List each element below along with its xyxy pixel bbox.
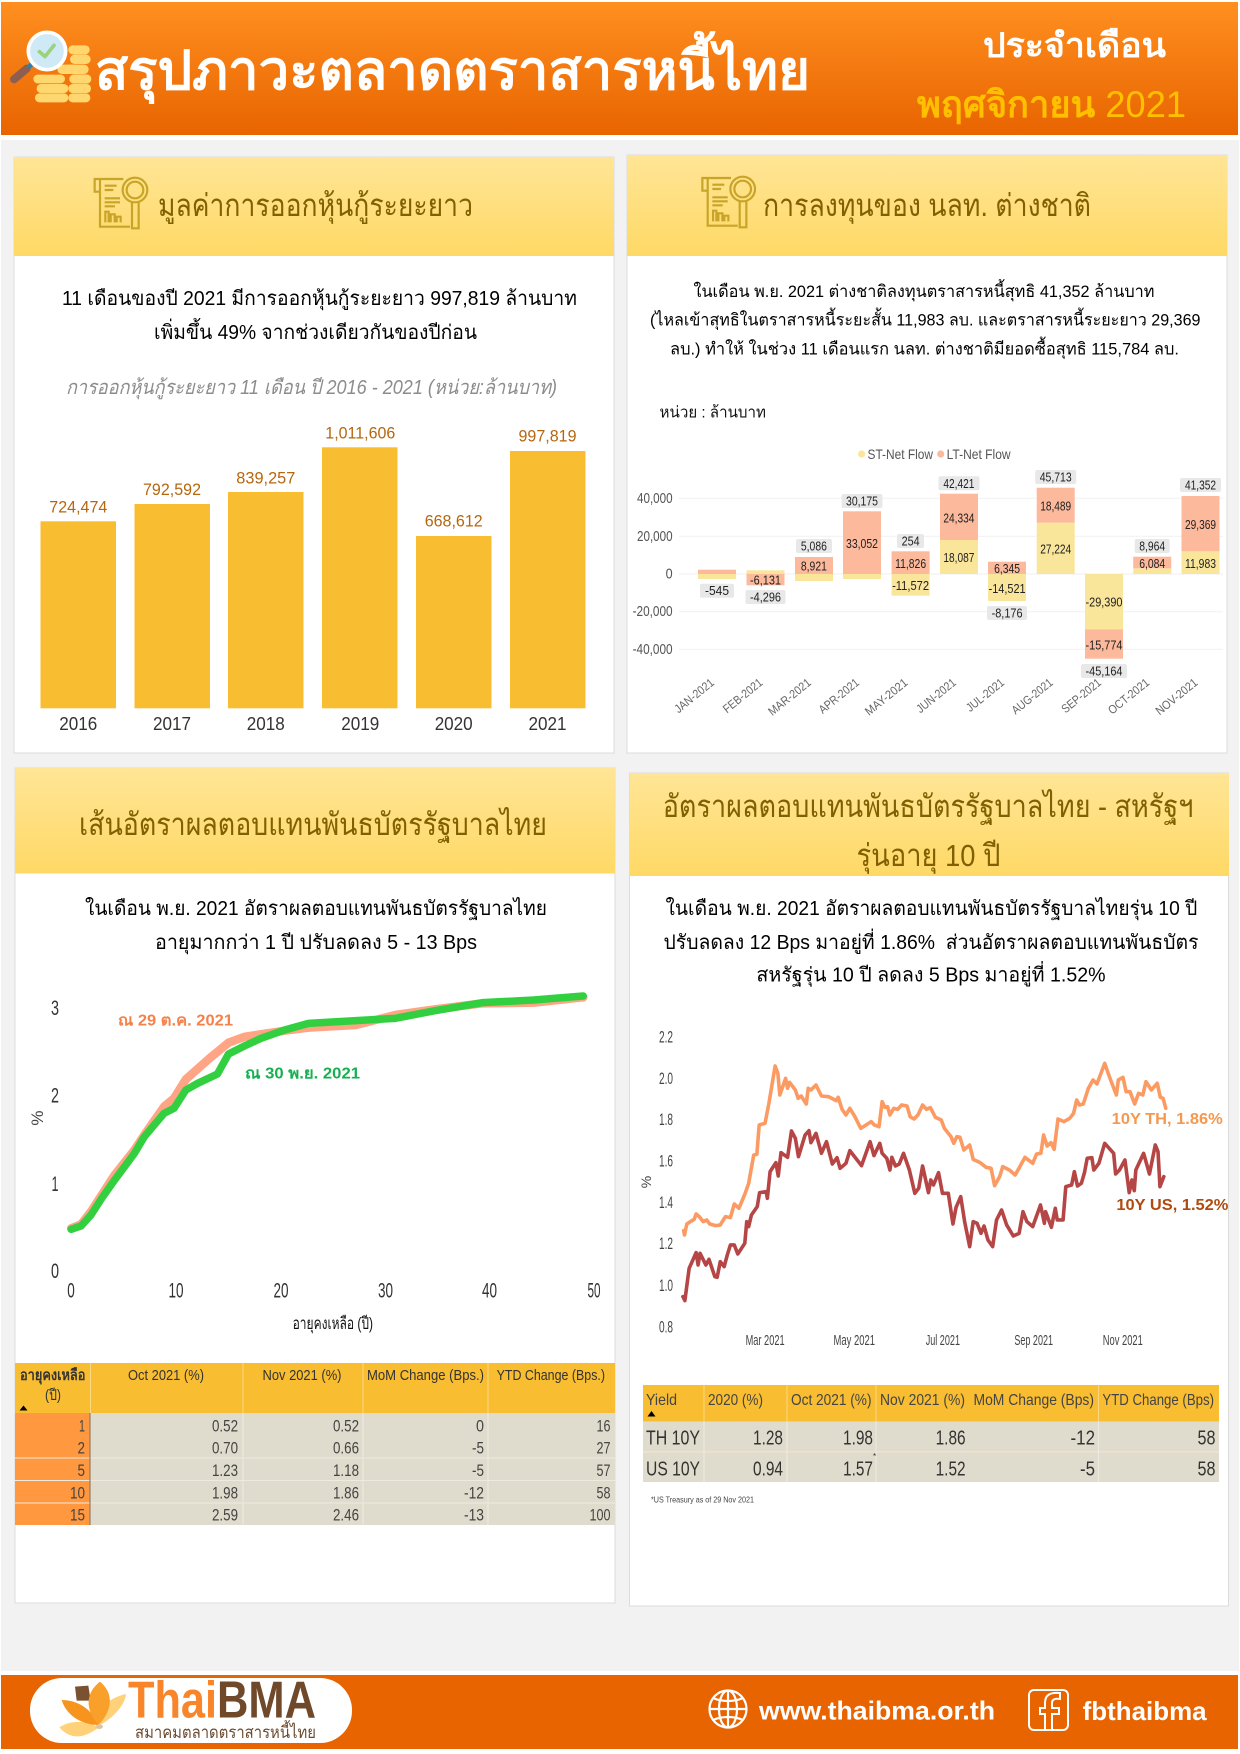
stacked bar chart: net flows: -11,572 bbox=[892, 578, 929, 593]
summary text: ในเดือน พ.ย. 2021 อัตราผลตอบแทนพันธบัตรรัฐบาลไทย bbox=[85, 897, 547, 920]
line chart: 10-year yields: 1.2 bbox=[659, 1234, 673, 1253]
line chart: 10-year yields: 2.0 bbox=[659, 1069, 673, 1088]
period month: พฤศจิกายน 2021 bbox=[917, 84, 1186, 125]
summary text: (ไหลเข้าสุทธิในตราสารหนี้ระยะสั้น 11,983 ลบ. และตราสารหนี้ระยะยาว 29,369 bbox=[650, 308, 1200, 330]
table: yield by remaining maturity: 1.23 bbox=[212, 1461, 238, 1480]
table: yield by remaining maturity: 0.52 bbox=[333, 1417, 359, 1436]
stacked bar chart: net flows: 45,713 bbox=[1040, 470, 1072, 484]
summary text: เพิ่มขึ้น 49% จากช่วงเดียวกันของปีก่อน bbox=[154, 318, 477, 344]
bar chart: annual issuance: 1,011,606 bbox=[325, 423, 395, 442]
table: yield by remaining maturity: 0 bbox=[476, 1417, 484, 1436]
stacked bar chart: net flows: 11,983 bbox=[1185, 556, 1216, 571]
bar chart: annual issuance: 2017 bbox=[153, 714, 191, 734]
ThaiBMA logo bbox=[30, 1672, 352, 1743]
icon: facebook bbox=[1029, 1690, 1068, 1730]
panel heading band bbox=[14, 157, 614, 256]
table: 10-year yield comparison: -5 bbox=[1080, 1458, 1095, 1480]
bar chart: annual issuance: 997,819 bbox=[518, 427, 576, 446]
summary text bbox=[85, 897, 547, 955]
summary text bbox=[650, 279, 1200, 360]
stacked bar chart: net flows: MAR-2021 bbox=[765, 675, 814, 718]
line chart: yield curve: 3 bbox=[51, 997, 59, 1020]
table: yield by remaining maturity: YTD Change (Bps.) bbox=[497, 1367, 605, 1384]
table: 10-year yield comparison: MoM Change (Bps) bbox=[974, 1392, 1094, 1409]
stacked bar chart: net flows: SEP-2021 bbox=[1059, 675, 1104, 716]
table: 10-year yield comparison: 1.57 bbox=[843, 1458, 873, 1480]
table: yield by remaining maturity: Oct 2021 (%) bbox=[128, 1367, 204, 1384]
table: yield by remaining maturity: -12 bbox=[464, 1484, 484, 1503]
stacked bar chart: net flows: FEB-2021 bbox=[720, 675, 766, 716]
table: 10-year yield comparison: Yield bbox=[646, 1392, 677, 1409]
table: 10-year yield comparison: 58 bbox=[1198, 1458, 1216, 1480]
heading text: การลงทุนของ นลท. ต่างชาติ bbox=[763, 188, 1091, 225]
table: 10-year yield comparison: Nov 2021 (%) bbox=[880, 1392, 965, 1409]
stacked bar chart: net flows: JUL-2021 bbox=[963, 675, 1007, 715]
table: yield by remaining maturity: 57 bbox=[596, 1461, 610, 1480]
line chart: yield curve: 20 bbox=[274, 1280, 288, 1303]
line chart: 10-year yields: 1.8 bbox=[659, 1110, 673, 1129]
bar chart: annual issuance: 668,612 bbox=[425, 512, 483, 531]
line chart: 10-year yields: Mar 2021 bbox=[746, 1332, 785, 1349]
icon: globe bbox=[710, 1690, 746, 1728]
summary text: อายุมากกว่า 1 ปี ปรับลดลง 5 - 13 Bps bbox=[155, 932, 477, 955]
line chart: 10-year yields: 10Y TH, 1.86% bbox=[1112, 1111, 1223, 1128]
line chart: 10-year yields: 1.6 bbox=[659, 1152, 673, 1170]
table: 10-year yield comparison: * bbox=[873, 1452, 876, 1461]
line chart: 10-year yields: 1.0 bbox=[659, 1276, 673, 1295]
panel: foreign investor flows bbox=[627, 155, 1227, 753]
stacked bar chart: net flows: -8,176 bbox=[992, 606, 1023, 620]
stacked bar chart: net flows: 5,086 bbox=[801, 538, 827, 554]
legend: ST-Net Flow bbox=[868, 446, 934, 462]
panel heading band bbox=[627, 155, 1227, 256]
table: 10-year yield comparison: 2020 (%) bbox=[708, 1392, 763, 1409]
table: 10-year yield comparison: 58 bbox=[1198, 1428, 1216, 1450]
table: 10-year yield comparison: 0.94 bbox=[753, 1458, 783, 1480]
period label: ประจำเดือน bbox=[983, 27, 1166, 65]
website address: www.thaibma.or.th bbox=[758, 1696, 995, 1726]
line chart: 10-year yields: Nov 2021 bbox=[1103, 1332, 1143, 1349]
stacked bar chart: net flows: -15,774 bbox=[1086, 638, 1122, 652]
facebook page name: fbthaibma bbox=[1083, 1696, 1207, 1726]
table: yield by remaining maturity: -13 bbox=[464, 1506, 484, 1525]
summary text: ในเดือน พ.ย. 2021 อัตราผลตอบแทนพันธบัตรรัฐบาลไทยรุ่น 10 ปี bbox=[666, 897, 1197, 921]
line chart: 10-year yields bbox=[638, 1028, 1228, 1349]
icon: coins and magnifier bbox=[14, 32, 91, 102]
summary text bbox=[664, 897, 1199, 988]
stacked bar chart: net flows: 20,000 bbox=[637, 528, 673, 545]
line chart: 10-year yields: % bbox=[638, 1176, 654, 1188]
table: yield by remaining maturity: 5 bbox=[78, 1461, 85, 1480]
ThaiBMA logo: สมาคมตลาดตราสารหนี้ไทย bbox=[135, 1720, 316, 1742]
icon: report with magnifier bbox=[702, 177, 755, 227]
legend bbox=[858, 446, 1011, 462]
line chart: 10-year yields: 0.8 bbox=[659, 1318, 673, 1336]
summary text: ปรับลดลง 12 Bps มาอยู่ที่ 1.86% ส่วนอัตราผลตอบแทนพันธบัตร bbox=[664, 928, 1199, 955]
stacked bar chart: net flows: MAY-2021 bbox=[862, 675, 911, 718]
stacked bar chart: net flows: 24,334 bbox=[943, 510, 974, 526]
heading text: รุ่นอายุ 10 ปี bbox=[856, 838, 1000, 875]
table: yield by remaining maturity: Nov 2021 (%) bbox=[262, 1367, 342, 1384]
line chart: yield curve: อายุคงเหลือ (ปี) bbox=[293, 1314, 373, 1334]
bar chart: annual issuance: 2018 bbox=[247, 714, 285, 734]
table: 10-year yield comparison: 1.52 bbox=[936, 1458, 966, 1480]
line chart: yield curve: 30 bbox=[378, 1280, 393, 1303]
panel: long-term debenture issuance bbox=[14, 157, 614, 753]
table: yield by remaining maturity: 1 bbox=[79, 1417, 85, 1436]
title: สรุปภาวะตลาดตราสารหนี้ไทย bbox=[95, 31, 810, 105]
table: 10-year yield comparison: 1.98 bbox=[843, 1428, 873, 1450]
stacked bar chart: net flows: -45,164 bbox=[1086, 664, 1122, 678]
ThaiBMA logo: Thai bbox=[128, 1672, 217, 1730]
table: yield by remaining maturity: 15 bbox=[70, 1506, 85, 1525]
table: yield by remaining maturity: อายุคงเหลือ bbox=[20, 1367, 85, 1385]
table: yield by remaining maturity: 16 bbox=[596, 1417, 610, 1436]
panel: Thai vs US 10-year yields bbox=[630, 773, 1229, 1606]
table: yield by remaining maturity: 100 bbox=[590, 1506, 610, 1525]
line chart: 10-year yields: Sep 2021 bbox=[1014, 1332, 1053, 1349]
stacked bar chart: net flows: 29,369 bbox=[1185, 517, 1216, 532]
line chart: yield curve: 40 bbox=[482, 1280, 497, 1303]
stacked bar chart: net flows: 8,921 bbox=[801, 558, 827, 574]
panel heading band bbox=[630, 773, 1229, 876]
table: yield by remaining maturity bbox=[15, 1363, 615, 1525]
line chart: yield curve: 0 bbox=[67, 1280, 75, 1303]
table: yield by remaining maturity: 1.98 bbox=[212, 1484, 238, 1503]
stacked bar chart: net flows: 30,175 bbox=[846, 494, 878, 508]
stacked bar chart: net flows: -6,131 bbox=[750, 572, 781, 588]
legend: LT-Net Flow bbox=[947, 446, 1011, 462]
line chart: 10-year yields: Jul 2021 bbox=[926, 1332, 960, 1349]
stacked bar chart: net flows: 6,345 bbox=[994, 561, 1020, 576]
panel: Thai government yield curve bbox=[15, 768, 615, 1603]
bar chart: annual issuance: 839,257 bbox=[236, 468, 295, 487]
stacked bar chart: net flows: 18,087 bbox=[943, 550, 974, 565]
table: yield by remaining maturity: 1.18 bbox=[333, 1461, 359, 1480]
table: 10-year yield comparison: -12 bbox=[1070, 1428, 1095, 1450]
line chart: yield curve: 10 bbox=[168, 1280, 184, 1303]
stacked bar chart: net flows: JUN-2021 bbox=[913, 675, 959, 716]
bar chart: annual issuance: 792,592 bbox=[143, 480, 201, 499]
table: yield by remaining maturity: (ปี) bbox=[45, 1387, 61, 1404]
bar chart: annual issuance: 724,474 bbox=[49, 498, 107, 517]
stacked bar chart: net flows: APR-2021 bbox=[816, 675, 862, 717]
summary text: 11 เดือนของปี 2021 มีการออกหุ้นกู้ระยะยาว 997,819 ล้านบาท bbox=[62, 288, 577, 311]
unit label: หน่วย : ล้านบาท bbox=[660, 404, 766, 422]
footer bar bbox=[1, 1672, 1238, 1749]
stacked bar chart: net flows: -4,296 bbox=[750, 590, 781, 604]
table: yield by remaining maturity: 2 bbox=[78, 1439, 85, 1458]
stacked bar chart: net flows: 33,052 bbox=[846, 536, 878, 551]
stacked bar chart: net flows: -14,521 bbox=[989, 581, 1026, 596]
line chart: 10-year yields: 2.2 bbox=[659, 1028, 673, 1046]
line chart: yield curve: 2 bbox=[51, 1084, 59, 1108]
icon: lotus bbox=[59, 1682, 126, 1736]
summary text bbox=[62, 288, 577, 344]
summary text: ลบ.) ทำให้ ในช่วง 11 เดือนแรก นลท. ต่างชาติมียอดซื้อสุทธิ 115,784 ลบ. bbox=[670, 336, 1179, 360]
table: 10-year yield comparison: 1.86 bbox=[936, 1428, 966, 1450]
bar chart: annual issuance bbox=[40, 423, 586, 734]
table: 10-year yield comparison: 1.28 bbox=[753, 1428, 783, 1450]
bar chart: annual issuance: 2021 bbox=[528, 714, 566, 734]
table: 10-year yield comparison: YTD Change (Bps) bbox=[1102, 1392, 1214, 1409]
line chart: 10-year yields: 10Y US, 1.52% bbox=[1116, 1197, 1228, 1214]
stacked bar chart: net flows: 40,000 bbox=[637, 490, 673, 507]
table: yield by remaining maturity: 0.66 bbox=[333, 1439, 359, 1458]
header banner bbox=[1, 2, 1238, 135]
table: yield by remaining maturity: 2.59 bbox=[212, 1506, 238, 1525]
bar chart: annual issuance: 2020 bbox=[435, 714, 473, 734]
stacked bar chart: net flows: 27,224 bbox=[1040, 542, 1071, 556]
line chart: yield curve: ณ 29 ต.ค. 2021 bbox=[118, 1013, 233, 1030]
stacked bar chart: net flows: -40,000 bbox=[633, 641, 673, 658]
stacked bar chart: net flows: -29,390 bbox=[1086, 594, 1122, 610]
bar chart: annual issuance: 2019 bbox=[341, 714, 379, 734]
stacked bar chart: net flows: AUG-2021 bbox=[1009, 675, 1056, 717]
stacked bar chart: net flows: 0 bbox=[666, 566, 673, 582]
line chart: yield curve: 50 bbox=[588, 1280, 600, 1303]
heading text bbox=[663, 789, 1193, 875]
stacked bar chart: net flows: -20,000 bbox=[633, 603, 673, 620]
line chart: 10-year yields: 1.4 bbox=[659, 1193, 673, 1212]
table: yield by remaining maturity: -5 bbox=[472, 1461, 484, 1480]
table: yield by remaining maturity: 1.86 bbox=[333, 1484, 359, 1503]
bar chart: annual issuance: 2016 bbox=[59, 714, 97, 734]
heading text: เส้นอัตราผลตอบแทนพันธบัตรรัฐบาลไทย bbox=[79, 807, 547, 843]
summary text: สหรัฐรุ่น 10 ปี ลดลง 5 Bps มาอยู่ที่ 1.52% bbox=[756, 961, 1106, 988]
ThaiBMA logo: BMA bbox=[217, 1672, 316, 1730]
table: yield by remaining maturity: 0.52 bbox=[212, 1417, 238, 1436]
stacked bar chart: net flows: NOV-2021 bbox=[1153, 675, 1201, 718]
line chart: yield curve: 1 bbox=[52, 1173, 58, 1196]
icon: report with magnifier bbox=[95, 178, 147, 228]
line chart: 10-year yields: May 2021 bbox=[834, 1332, 875, 1349]
table: 10-year yield comparison: Oct 2021 (%) bbox=[791, 1392, 872, 1409]
table: yield by remaining maturity: 0.70 bbox=[212, 1439, 238, 1458]
table: yield by remaining maturity: 27 bbox=[596, 1439, 610, 1458]
stacked bar chart: net flows: 8,964 bbox=[1139, 538, 1165, 554]
stacked bar chart: net flows: 41,352 bbox=[1185, 478, 1216, 492]
summary text: ในเดือน พ.ย. 2021 ต่างชาติลงทุนตราสารหนี้สุทธิ 41,352 ล้านบาท bbox=[694, 279, 1154, 302]
table: 10-year yield comparison: US 10Y bbox=[646, 1458, 700, 1480]
table: yield by remaining maturity: 2.46 bbox=[333, 1506, 359, 1525]
stacked bar chart: net flows bbox=[633, 470, 1223, 718]
table: yield by remaining maturity: 58 bbox=[596, 1484, 610, 1503]
table: 10-year yield comparison bbox=[643, 1385, 1219, 1482]
line chart: yield curve: % bbox=[28, 1110, 47, 1126]
stacked bar chart: net flows: 42,421 bbox=[943, 476, 974, 491]
table: yield by remaining maturity: 10 bbox=[70, 1484, 85, 1503]
line chart: yield curve: ณ 30 พ.ย. 2021 bbox=[245, 1066, 360, 1083]
stacked bar chart: net flows: 6,084 bbox=[1139, 556, 1165, 571]
table: yield by remaining maturity: -5 bbox=[472, 1439, 484, 1458]
panel heading band bbox=[15, 768, 615, 874]
stacked bar chart: net flows: JAN-2021 bbox=[672, 675, 717, 716]
stacked bar chart: net flows: 18,489 bbox=[1040, 498, 1071, 514]
stacked bar chart: net flows: -545 bbox=[705, 583, 729, 598]
line chart: yield curve: 0 bbox=[51, 1260, 59, 1283]
table: yield by remaining maturity: MoM Change (Bps.) bbox=[367, 1367, 484, 1384]
stacked bar chart: net flows: 254 bbox=[902, 534, 920, 548]
stacked bar chart: net flows: OCT-2021 bbox=[1105, 675, 1152, 717]
heading text: มูลค่าการออกหุ้นกู้ระยะยาว bbox=[158, 188, 473, 225]
stacked bar chart: net flows: 11,826 bbox=[895, 556, 926, 571]
line chart: yield curve bbox=[28, 996, 600, 1334]
table: 10-year yield comparison: TH 10Y bbox=[646, 1428, 700, 1450]
footnote: *US Treasury as of 29 Nov 2021 bbox=[651, 1496, 754, 1504]
chart subtitle: การออกหุ้นกู้ระยะยาว 11 เดือน ปี 2016 - 2021 (หน่วย:ล้านบาท) bbox=[66, 377, 557, 400]
